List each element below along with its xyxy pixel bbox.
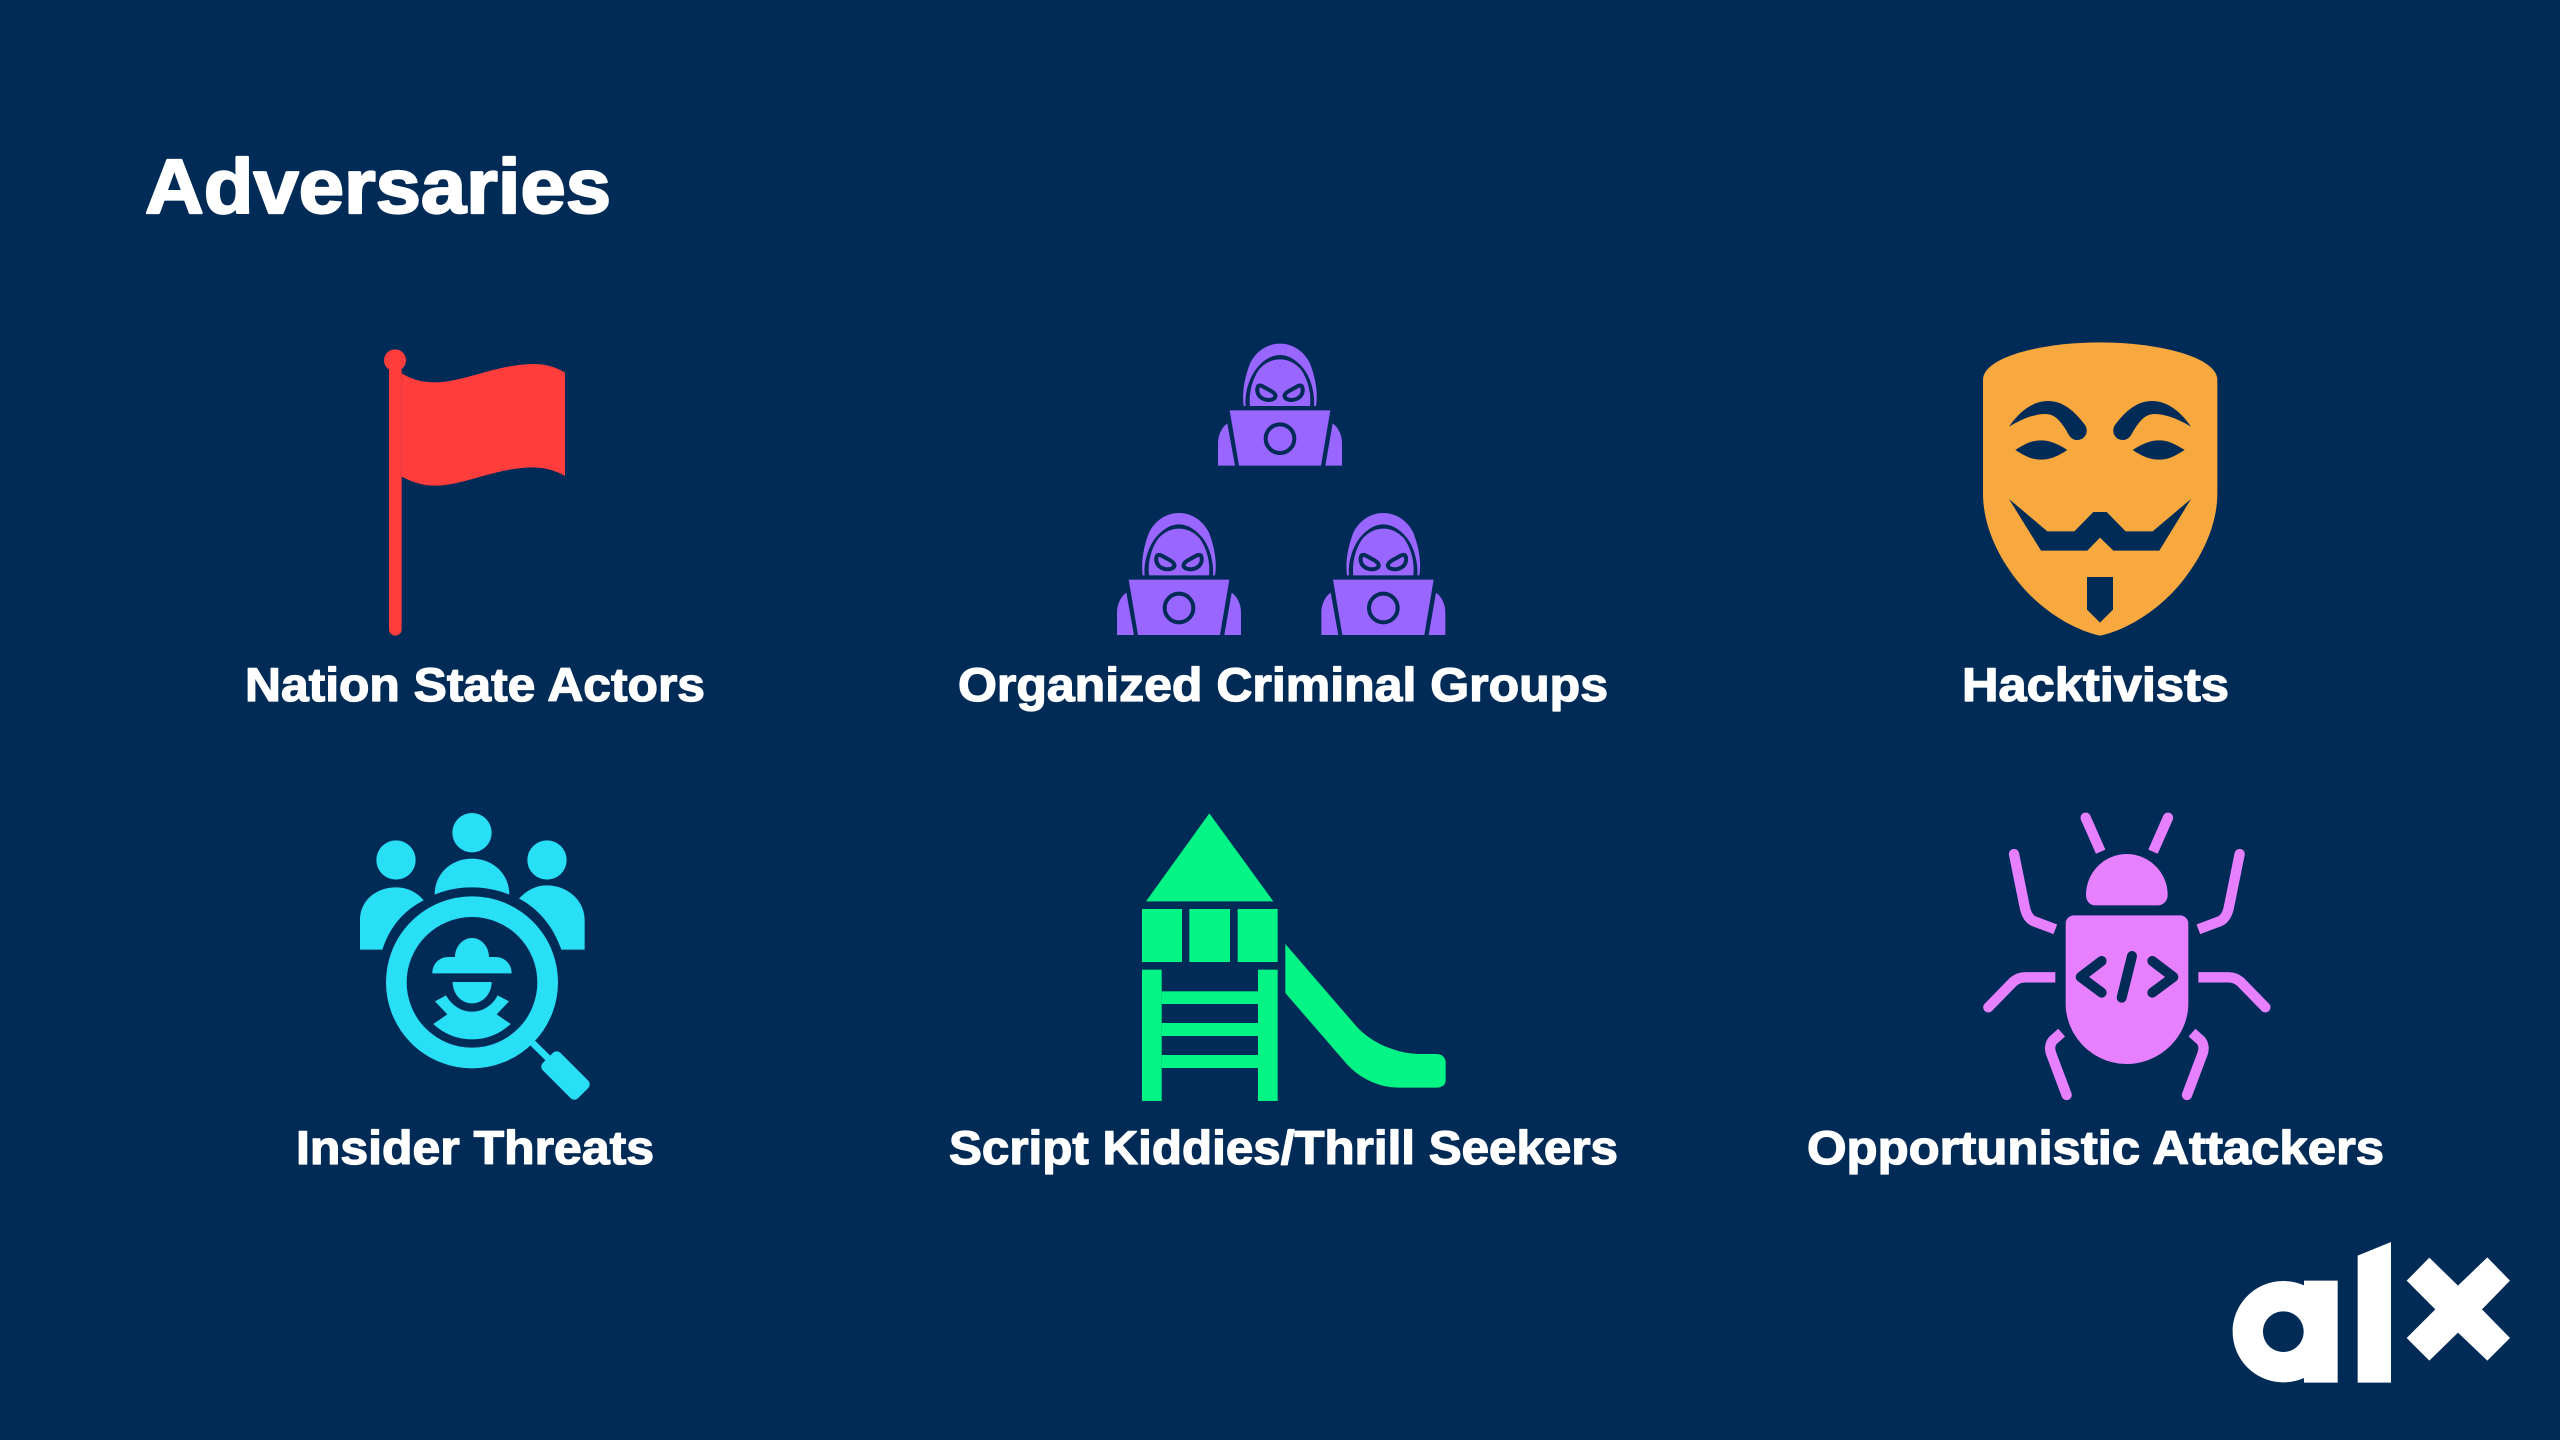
title: Adversaries [145, 144, 611, 230]
label: Organized Criminal Groups: Organized Criminal Groups [958, 658, 1608, 711]
panel: Hacktivists [1962, 342, 2229, 711]
label: Insider Threats: Insider Threats [296, 1121, 654, 1174]
panel: Script Kiddies/Thrill Seekers [949, 813, 1618, 1174]
icon: red flag [384, 349, 565, 636]
panel: Nation State Actors [245, 349, 705, 711]
icon: orange mask [1983, 342, 2217, 636]
label: Hacktivists: Hacktivists [1962, 658, 2229, 711]
icon: code bug [1983, 812, 2270, 1100]
logo: alx [2233, 1242, 2510, 1383]
panel: Organized Criminal Groups [958, 344, 1608, 711]
icon: magnifier over people [360, 813, 585, 1094]
panel: Insider Threats [296, 813, 654, 1174]
label: Opportunistic Attackers: Opportunistic Attackers [1807, 1121, 2384, 1174]
panel: Opportunistic Attackers [1807, 812, 2384, 1174]
icon: three hooded hackers [1117, 344, 1445, 635]
icon: playground slide [1142, 813, 1446, 1101]
label: Script Kiddies/Thrill Seekers: Script Kiddies/Thrill Seekers [949, 1121, 1618, 1174]
label: Nation State Actors: Nation State Actors [245, 658, 705, 711]
